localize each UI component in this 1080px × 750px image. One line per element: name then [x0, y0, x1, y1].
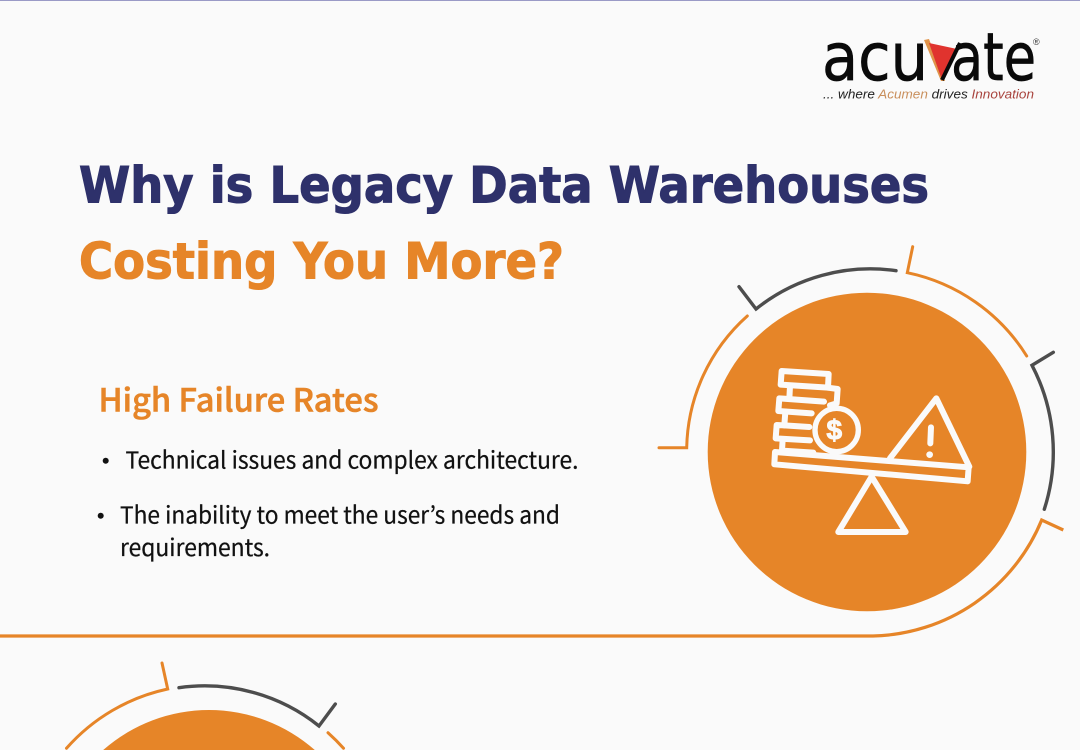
- ring around lower cropped circle: [66, 663, 344, 748]
- exclamation mark: [926, 427, 933, 458]
- warning triangle: [890, 398, 969, 467]
- section heading: High Failure Rates: [98, 376, 378, 422]
- fulcrum: [838, 477, 906, 532]
- registered mark: ®: [1033, 37, 1040, 47]
- bullet 2: The inability to meet the user’s needs and: [120, 496, 560, 530]
- orange circle: [708, 293, 1026, 611]
- bullet 2: requirements.: [120, 529, 270, 563]
- dollar coin: [815, 408, 858, 452]
- scale beam: [774, 452, 969, 481]
- coin stack: [776, 371, 838, 453]
- bullet 1: Technical issues and complex architecture.: [126, 442, 578, 476]
- title line 2: Costing You More?: [79, 232, 564, 290]
- logo mark: red triangle V: [924, 39, 960, 81]
- icon: scale with coins and warning triangle: [774, 371, 969, 532]
- bullet 2: [98, 496, 560, 563]
- title: [79, 156, 929, 290]
- dollar coin: $: [827, 415, 843, 446]
- logo wordmark left: acu: [822, 19, 928, 96]
- lower orange circle: [103, 710, 315, 750]
- logo wordmark right: ate: [951, 19, 1036, 96]
- title line 1: Why is Legacy Data Warehouses: [79, 156, 929, 214]
- text block: High Failure Rates: [98, 376, 578, 563]
- logo tagline: ... where Acumen drives Innovation: [823, 88, 1034, 102]
- ring and divider line around scale icon: [0, 247, 1063, 636]
- logo: acuvate: [822, 19, 1040, 102]
